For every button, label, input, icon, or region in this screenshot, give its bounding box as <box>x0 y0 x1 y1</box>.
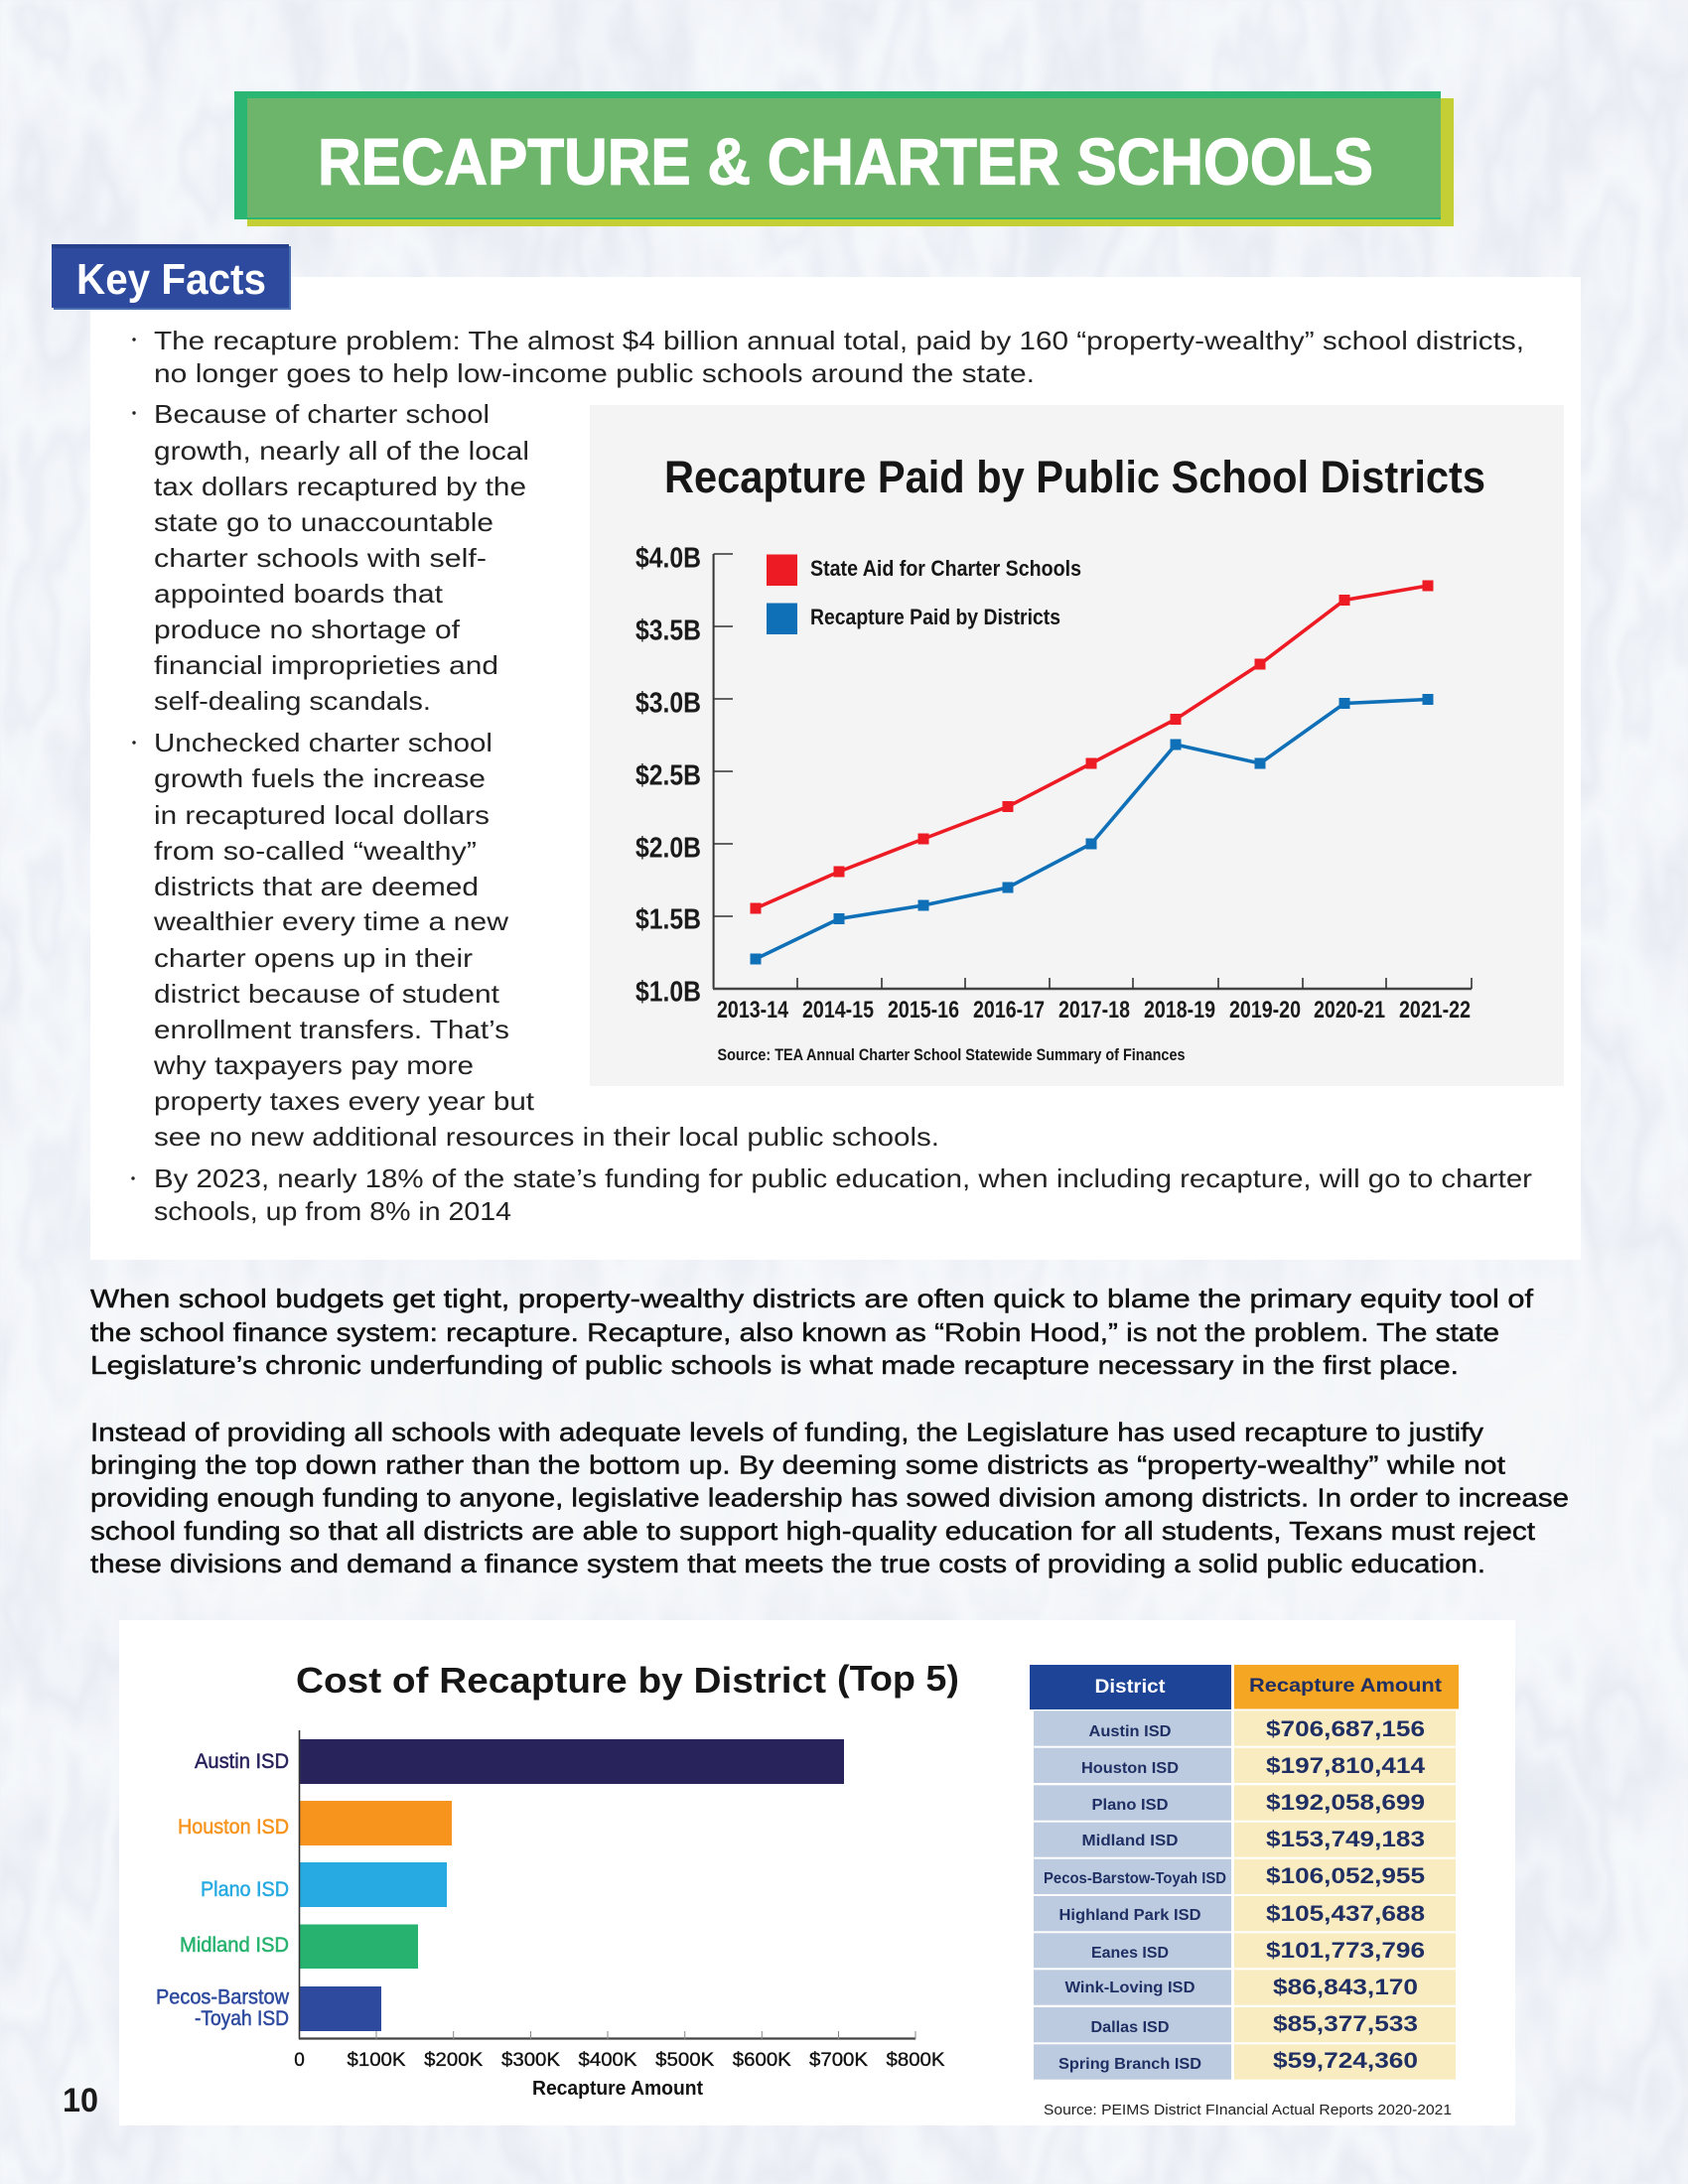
text block: second paragraph: school funding so that all districts are able to support high-quality education for all students, Texans must reject <box>90 1516 1536 1546</box>
bullet 3: unchecked charter growth <box>132 728 939 1152</box>
bar category labels: -Toyah ISD <box>195 2007 289 2030</box>
title banner <box>234 91 1454 226</box>
table district names: Dallas ISD <box>1090 2019 1170 2036</box>
bar axes <box>299 1730 915 2039</box>
bar chart title: Cost of Recapture by District <box>296 1660 826 1701</box>
y axis labels: $3.0B <box>635 687 701 719</box>
bullet 3: unchecked charter growth: wealthier every time a new <box>153 906 508 936</box>
bullet 2: charter school growth: Because of charter school <box>154 399 490 429</box>
y axis labels: $1.5B <box>635 903 701 935</box>
bullet 4: 18 percent by 2023 <box>131 1163 1532 1226</box>
table recapture amounts: $59,724,360 <box>1273 2048 1418 2073</box>
y axis labels: $2.5B <box>635 760 701 792</box>
table district names: Plano ISD <box>1092 1797 1168 1814</box>
x axis labels: 2017-18 <box>1058 997 1130 1024</box>
bar value axis labels: 0 <box>294 2050 305 2071</box>
text block: intro paragraph <box>90 1284 1534 1380</box>
table source: Source: PEIMS District FInancial Actual Reports 2020-2021 <box>1044 2102 1452 2118</box>
text block: intro paragraph: the school finance system: recapture. Recapture, also known as “Robin Hood,” is not the problem. The state <box>90 1317 1499 1347</box>
table recapture amounts: $706,687,156 <box>1266 1716 1425 1741</box>
table recapture amounts <box>1266 1716 1426 2073</box>
y axis labels: $3.5B <box>635 615 701 647</box>
bullet 3: unchecked charter growth: growth fuels the increase <box>154 763 486 793</box>
bullet 4: 18 percent by 2023: By 2023, nearly 18% of the state’s funding for public education, when including recapture, will go to charter <box>154 1163 1532 1193</box>
table recapture amounts: $85,377,533 <box>1273 2011 1418 2036</box>
text block: intro paragraph: When school budgets get tight, property-wealthy districts are often quick to blame the primary equity tool of <box>90 1284 1534 1313</box>
table district names: Midland ISD <box>1082 1833 1178 1849</box>
chart title: Recapture Paid by Public School Districts <box>664 452 1485 502</box>
bar value axis labels: $800K <box>886 2050 945 2071</box>
bar axis title: Recapture Amount <box>532 2078 703 2100</box>
bullet 2: charter school growth: state go to unaccountable <box>154 507 493 537</box>
bar value axis labels: $500K <box>655 2050 715 2071</box>
line chart: recapture paid by public school districts <box>590 405 1564 1086</box>
bullet 4: 18 percent by 2023: schools, up from 8% in 2014 <box>154 1196 511 1226</box>
text block: second paragraph <box>90 1418 1569 1578</box>
bar category labels: Houston ISD <box>178 1816 289 1839</box>
bullet 2: charter school growth: financial improprieties and <box>154 650 498 680</box>
table district names: Highland Park ISD <box>1058 1907 1201 1924</box>
bar category labels <box>156 1750 290 2030</box>
table district names: Austin ISD <box>1088 1723 1172 1740</box>
legend: State Aid for Charter Schools <box>810 556 1081 581</box>
x axis labels <box>717 997 1471 1024</box>
table recapture amounts: $101,773,796 <box>1266 1938 1425 1963</box>
text block: second paragraph: Instead of providing all schools with adequate levels of funding, the Legislature has used recapture to justify <box>90 1418 1483 1447</box>
table header: District <box>1094 1677 1166 1698</box>
x axis labels: 2020-21 <box>1314 997 1385 1024</box>
bullet 3: unchecked charter growth: see no new additional resources in their local public schools. <box>154 1122 939 1152</box>
bullet 2: charter school growth: growth, nearly all of the local <box>154 436 529 466</box>
table header: Recapture Amount <box>1249 1676 1443 1697</box>
table district names <box>1044 1723 1226 2073</box>
bullet 3: unchecked charter growth: Unchecked charter school <box>154 728 492 757</box>
bullet 3: unchecked charter growth: districts that are deemed <box>154 872 479 901</box>
key facts heading tab <box>52 244 291 310</box>
bullet 3: unchecked charter growth: from so-called “wealthy” <box>154 836 477 866</box>
bar value axis labels: $600K <box>733 2050 791 2071</box>
bar category labels: Austin ISD <box>195 1750 289 1773</box>
title: RECAPTURE & CHARTER SCHOOLS <box>318 125 1373 199</box>
bar chart title: (Top 5) <box>837 1658 959 1699</box>
bar category labels: Plano ISD <box>201 1878 289 1901</box>
table recapture amounts: $192,058,699 <box>1266 1790 1425 1815</box>
bar chart <box>156 1730 945 2100</box>
bar value axis labels <box>294 2050 945 2071</box>
bullet 2: charter school growth: tax dollars recaptured by the <box>154 472 526 501</box>
table recapture amounts: $105,437,688 <box>1266 1901 1425 1926</box>
y axis labels: $1.0B <box>635 977 701 1009</box>
bullet 1: the recapture problem: no longer goes to help low-income public schools around the state. <box>154 358 1035 388</box>
x axis labels: 2016-17 <box>973 997 1045 1024</box>
text block: intro paragraph: Legislature’s chronic underfunding of public schools is what made recapture necessary in the first place. <box>90 1350 1459 1380</box>
bullet 2: charter school growth: self-dealing scandals. <box>154 686 431 716</box>
red line: state aid for charter schools <box>751 580 1434 913</box>
table district names: Spring Branch ISD <box>1058 2056 1201 2073</box>
x axis labels: 2021-22 <box>1399 997 1471 1024</box>
bar value axis labels: $400K <box>578 2050 637 2071</box>
chart axes <box>713 554 1472 989</box>
bar value axis labels: $100K <box>348 2050 406 2071</box>
table row backgrounds <box>1034 1710 1456 2080</box>
x axis labels: 2013-14 <box>717 997 789 1024</box>
bar value axis labels: $700K <box>809 2050 868 2071</box>
bullet 3: unchecked charter growth: district because of student <box>154 979 500 1009</box>
bars <box>300 1739 844 2031</box>
bullet 2: charter school growth: appointed boards that <box>154 579 444 609</box>
bullet 2: charter school growth <box>132 399 529 716</box>
table district names: Pecos-Barstow-Toyah ISD <box>1044 1870 1226 1887</box>
key facts heading tab: Key Facts <box>76 255 266 304</box>
panel: cost of recapture by district <box>119 1620 1515 2125</box>
x axis labels: 2019-20 <box>1229 997 1301 1024</box>
bar category labels: Pecos-Barstow <box>156 1985 290 2009</box>
bar category labels: Midland ISD <box>180 1934 289 1957</box>
table recapture amounts: $86,843,170 <box>1273 1975 1418 1999</box>
y axis labels <box>635 542 701 1009</box>
table header <box>1030 1665 1459 1709</box>
bullet 1: the recapture problem <box>132 326 1524 388</box>
bullet 3: unchecked charter growth: charter opens up in their <box>154 943 473 973</box>
bullet 3: unchecked charter growth: enrollment transfers. That’s <box>154 1015 509 1044</box>
bullet 2: charter school growth: produce no shortage of <box>154 614 461 644</box>
x axis labels: 2018-19 <box>1144 997 1215 1024</box>
bullet 2: charter school growth: charter schools with self- <box>154 543 487 573</box>
table recapture amounts: $153,749,183 <box>1266 1827 1425 1851</box>
table: top 10 recapture amounts <box>1030 1665 1459 2118</box>
text block: second paragraph: bringing the top down rather than the bottom up. By deeming some districts as “property-wealthy” while not <box>90 1449 1506 1479</box>
text block: second paragraph: providing enough funding to anyone, legislative leadership has sowed division among districts. In order to increase <box>90 1483 1569 1513</box>
legend: Recapture Paid by Districts <box>810 605 1060 629</box>
bullet 3: unchecked charter growth: why taxpayers pay more <box>153 1050 474 1080</box>
blue line: recapture paid by districts <box>751 694 1434 965</box>
x axis labels: 2014-15 <box>802 997 874 1024</box>
table district names: Wink-Loving ISD <box>1064 1979 1196 1996</box>
table district names: Eanes ISD <box>1091 1945 1169 1962</box>
table recapture amounts: $106,052,955 <box>1266 1863 1425 1888</box>
bar value axis labels: $200K <box>424 2050 484 2071</box>
legend <box>767 554 1081 634</box>
y axis labels: $2.0B <box>635 832 701 864</box>
y axis labels: $4.0B <box>635 542 701 574</box>
chart source: Source: TEA Annual Charter School Statewide Summary of Finances <box>717 1046 1186 1064</box>
panel: key facts <box>52 244 1581 1260</box>
table district names: Houston ISD <box>1081 1760 1179 1777</box>
table recapture amounts: $197,810,414 <box>1266 1753 1426 1778</box>
text block: second paragraph: these divisions and demand a finance system that meets the true costs of providing a solid public education. <box>90 1549 1485 1578</box>
x axis labels: 2015-16 <box>888 997 959 1024</box>
bar value axis labels: $300K <box>501 2050 560 2071</box>
bullet 3: unchecked charter growth: in recaptured local dollars <box>154 800 490 830</box>
bullet 3: unchecked charter growth: property taxes every year but <box>154 1086 535 1116</box>
page number: 10 <box>63 2082 98 2119</box>
bullet 1: the recapture problem: The recapture problem: The almost $4 billion annual total, paid by 160 “property-wealthy” school districts, <box>154 326 1524 355</box>
